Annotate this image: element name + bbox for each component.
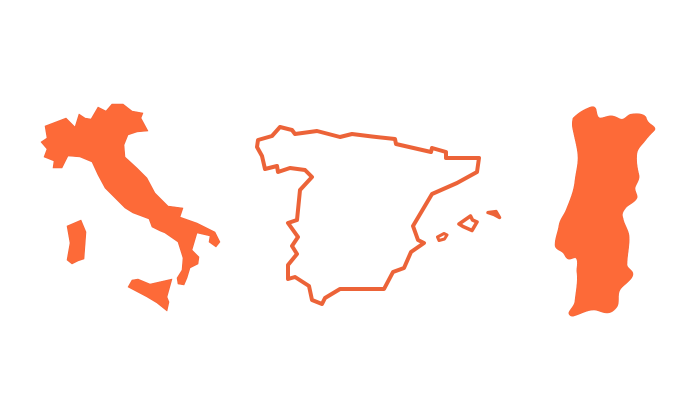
Mallorca outline <box>459 216 477 230</box>
map: Italy, solid <box>41 104 220 311</box>
Menorca outline <box>488 212 500 218</box>
Spain mainland outline <box>257 127 479 304</box>
Sardinia <box>67 220 86 264</box>
Sicily <box>128 279 172 311</box>
Italy mainland <box>41 104 220 285</box>
map: Spain, outline <box>257 127 500 304</box>
map: Portugal, solid <box>555 107 655 316</box>
Ibiza outline <box>438 234 447 240</box>
